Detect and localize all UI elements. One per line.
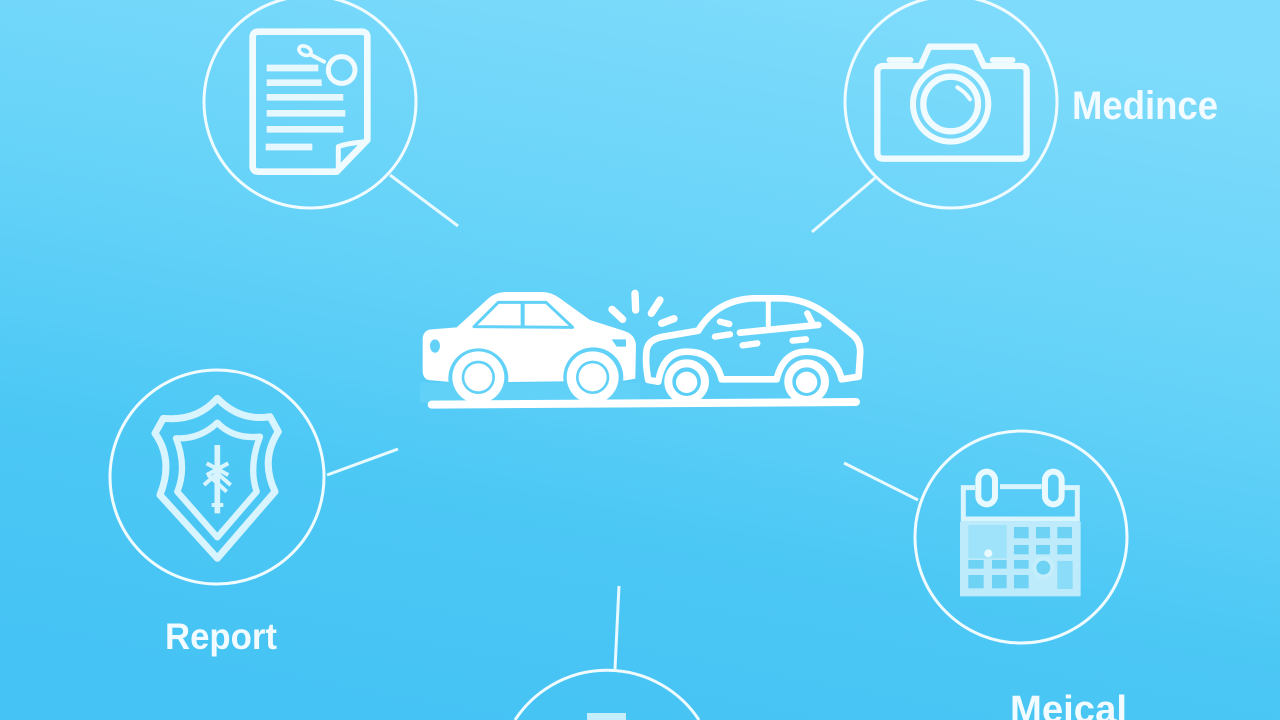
connector: document to car	[390, 175, 458, 226]
ground line	[432, 402, 856, 405]
icon: document in circle	[204, 0, 416, 208]
connector: calendar to car	[844, 463, 918, 500]
central illustration: two cars colliding	[420, 292, 860, 408]
connector: camera to car	[812, 178, 875, 232]
icon: camera in circle	[845, 0, 1057, 208]
left car	[420, 292, 640, 408]
icon: bottom circle, cropped	[515, 670, 699, 720]
icon: shield in circle	[110, 370, 324, 584]
label: Medince: Medince	[1072, 84, 1218, 128]
impact marks	[612, 293, 674, 323]
connector: shield to car	[327, 449, 398, 475]
right car	[646, 298, 860, 400]
connector: bottom circle to car	[615, 586, 619, 669]
label: Report: Report	[165, 616, 277, 657]
icon: calendar in circle	[915, 431, 1127, 643]
